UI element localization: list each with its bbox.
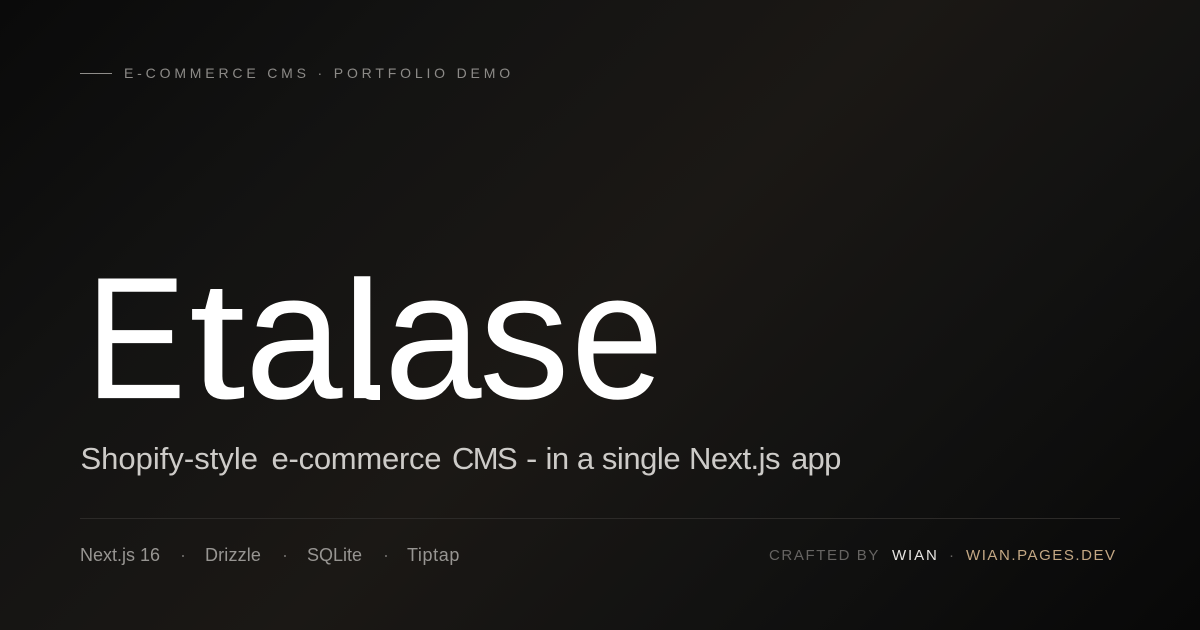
website link: WIAN.PAGES.DEV bbox=[966, 547, 1117, 564]
title letter l tail bbox=[360, 385, 380, 400]
crafted by label: CRAFTED BY bbox=[769, 547, 880, 564]
tech: SQLite: SQLite bbox=[307, 545, 362, 565]
subtitle: - bbox=[526, 441, 537, 476]
separator dot: · bbox=[180, 545, 186, 565]
subtitle: e-commerce bbox=[272, 441, 441, 476]
separator dot: · bbox=[282, 545, 288, 565]
title: a bbox=[384, 235, 482, 437]
tech: Next.js 16: Next.js 16 bbox=[80, 545, 160, 565]
subtitle: CMS bbox=[452, 441, 516, 476]
title bbox=[86, 235, 664, 437]
tech stack list bbox=[80, 545, 460, 565]
title: E bbox=[86, 242, 185, 436]
separator dot: · bbox=[383, 545, 389, 565]
eyebrow rule bbox=[80, 73, 112, 74]
title: e bbox=[571, 235, 664, 437]
eyebrow label: E-COMMERCE CMS · PORTFOLIO DEMO bbox=[124, 65, 514, 81]
credits bbox=[769, 547, 1117, 564]
tech: Tiptap: Tiptap bbox=[407, 545, 460, 565]
title: a bbox=[245, 235, 343, 437]
separator dot: · bbox=[949, 547, 954, 564]
subtitle: in a single bbox=[546, 441, 680, 476]
divider bbox=[80, 518, 1120, 519]
tech: Drizzle: Drizzle bbox=[205, 545, 261, 565]
title: l bbox=[342, 247, 383, 435]
subtitle: Shopify-style bbox=[80, 441, 258, 476]
title: s bbox=[479, 235, 570, 437]
subtitle bbox=[80, 441, 841, 476]
author name: WIAN bbox=[892, 547, 939, 564]
subtitle: Next.js bbox=[689, 441, 780, 476]
title: t bbox=[189, 247, 245, 435]
subtitle: app bbox=[791, 441, 841, 476]
